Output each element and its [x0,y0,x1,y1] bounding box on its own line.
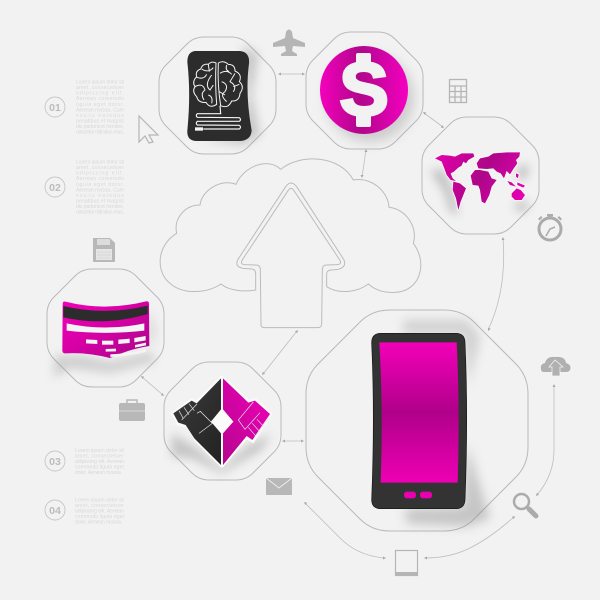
text block 03 [75,448,125,476]
text block 02: ligula eget dolor. [76,182,124,188]
text block 01: nascetur ridiculus mus. [76,129,124,135]
connector arrows [141,72,556,560]
text block 02: sociis natoque [76,193,124,199]
text block 01: penatibus et magnis [76,118,124,124]
panel: phone octagon [306,310,528,531]
text block 02: Aenean commodo [76,176,124,182]
icon: handshake sticker [170,376,273,473]
text block 02: amet, consectetuer [76,165,124,171]
icon: briefcase [119,400,145,421]
number badge 03: 03 [49,456,61,468]
icon: credit card sticker [53,301,157,378]
text block 02: nascetur ridiculus mus. [76,209,124,215]
number badge 02: 02 [49,182,61,194]
text block 04: dolor. Aenean massa. [75,519,122,525]
text block 03: Lorem ipsum dolor sit [75,448,125,454]
text block 02: adipiscing elit. [76,171,124,177]
icon: magnifier [514,494,536,516]
icon: calculator [450,80,466,102]
text block 04: Lorem ipsum dolor sit [75,497,125,503]
text block 01: Lorem ipsum dolor sit [76,80,125,86]
icon: airplane [273,30,305,56]
cloud upload outline [160,159,421,328]
icon: envelope [266,478,292,495]
number badge 04: 04 [49,505,61,517]
text block 02: penatibus et magnis [76,198,124,204]
text block 01: amet, consectetuer [76,85,124,91]
text block 04: amet, consectetuer [75,503,124,509]
icon: cloud upload [541,357,570,376]
icon: world map sticker [430,152,530,215]
step 02 [45,160,125,215]
text block 02: Lorem ipsum dolor sit [76,160,125,166]
panel: world map octagon [422,117,539,234]
text block 03: amet, consectetuer [75,453,124,459]
step 04 [45,497,125,525]
step 01 [45,80,125,135]
icon: smartphone sticker [372,320,490,527]
text block 02 [76,160,125,215]
text block 01: Aenean massa. Cum [76,107,124,113]
panel: dollar octagon [306,32,423,149]
step 03 [45,448,125,476]
panel: credit card octagon [47,269,164,387]
text block 01: sociis natoque [76,113,124,119]
text block 04: adipiscing elit. Aenean [75,508,124,514]
text block 03: adipiscing elit. Aenean [75,459,124,465]
text block 03: dolor. Aenean massa. [75,470,122,476]
text block 04: commodo ligula eget [75,514,125,520]
text block 03: commodo ligula eget [75,464,125,470]
icon: floppy disk [93,238,115,262]
panel: brain octagon [159,37,276,154]
text block 01: dis parturient montes, [76,124,124,130]
panel: handshake octagon [164,362,281,480]
text block 01: adipiscing elit. [76,90,124,96]
icon: tablet [395,550,418,576]
icon: cursor [139,116,158,143]
text block 01 [76,80,125,135]
dollar sign: S [339,48,389,131]
text block 01: ligula eget dolor. [76,102,124,108]
text block 01: Aenean commodo [76,96,124,102]
icon: stopwatch [538,214,562,240]
number badge 01: 01 [49,102,61,114]
text block 02: Aenean massa. Cum [76,187,124,193]
icon: brain sticker [187,45,260,145]
text block 04 [75,497,125,525]
text block 02: dis parturient montes, [76,204,124,210]
